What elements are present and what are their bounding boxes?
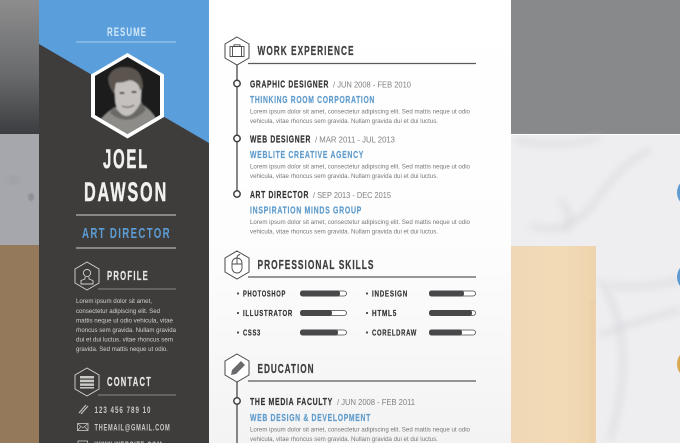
job: web designer: WEBLITE CREATIVE AGENCY: [250, 150, 364, 161]
education entry: vehicula, vitae rhoncus sem gravida. Nullam gravida dui et dui luctus.: [250, 436, 438, 443]
contact: email: THEMAIL@GMAIL.COM: [94, 422, 170, 434]
contact: phone: [79, 405, 152, 416]
profile text: dui et dui luctus. vitae rhoncus sem: [76, 336, 173, 344]
skill: html5: [366, 308, 476, 318]
job: graphic designer: vehicula, vitae rhoncus sem gravida. Nullam gravida dui et dui luctus.: [250, 118, 438, 125]
skill: photoshop: PHOTOSHOP: [243, 288, 286, 298]
job title: ART DIRECTOR: [82, 226, 171, 242]
heading: education: [225, 354, 476, 382]
profile heading with icon: [75, 262, 176, 290]
job: web designer: [250, 134, 470, 180]
contact heading with icon: [75, 368, 176, 396]
circles at right edge: [677, 178, 680, 379]
job: web designer: / MAR 2011 - JUL 2013: [315, 136, 396, 144]
background: wood board: [0, 245, 596, 443]
heading: work experience: WORK EXPERIENCE: [258, 44, 354, 58]
contact: phone: 123 456 789 10: [94, 405, 152, 416]
contact heading with icon: CONTACT: [107, 375, 152, 389]
skill: html5: HTML5: [372, 308, 397, 318]
profile text: [76, 298, 176, 353]
job: art director: / SEP 2013 - DEC 2015: [313, 191, 391, 200]
contact: website: [78, 440, 162, 443]
portrait hexagon: [91, 53, 164, 138]
blue header shape: [39, 0, 209, 143]
heading: work experience: [225, 37, 476, 65]
job: web designer: Lorem ipsum dolor sit amet, consectetur adipiscing elit. Sed mattis neque ut odio: [250, 164, 470, 170]
skills list: [237, 288, 476, 338]
profile text: gravida. Sed mattis neque ut odio.: [76, 346, 168, 353]
job: web designer: WEB DESIGNER: [250, 134, 311, 146]
education entry: THE MEDIA FACULTY: [250, 397, 333, 408]
heading: education: EDUCATION: [258, 362, 314, 376]
education entry: [250, 397, 470, 443]
main paper panel: [209, 0, 511, 443]
background: top grey wall: [0, 0, 680, 134]
sidebar panel: [39, 0, 209, 443]
job: art director: [250, 190, 470, 236]
icon: pencil: [231, 361, 245, 375]
skill: css3: CSS3: [243, 328, 261, 338]
skill: photoshop: [237, 288, 346, 298]
icon: briefcase: [230, 45, 244, 56]
heading: professional skills: PROFESSIONAL SKILLS: [258, 258, 374, 272]
education entry: Lorem ipsum dolor sit amet, consectetur adipiscing elit. Sed mattis neque ut odio: [250, 426, 470, 434]
skill: css3: [237, 328, 346, 338]
name: JOEL: [103, 144, 149, 174]
profile text: rhoncus sem gravida. Nullam gravida: [76, 327, 176, 334]
job: web designer: vehicula, vitae rhoncus sem gravida. Nullam gravida dui et dui luctus.: [250, 173, 438, 180]
job: art director: INSPIRATION MINDS GROUP: [250, 206, 362, 216]
skill: illustrator: [237, 308, 346, 318]
timeline: work experience: [234, 65, 240, 197]
skill: coreldraw: [366, 328, 476, 338]
job: graphic designer: THINKING ROOM CORPORATION: [250, 95, 375, 106]
job: graphic designer: GRAPHIC DESIGNER: [250, 80, 329, 90]
job: graphic designer: / JUN 2008 - FEB 2010: [333, 80, 412, 90]
job: art director: Lorem ipsum dolor sit amet, consectetur adipiscing elit. Sed mattis neque ut odio: [250, 219, 470, 226]
contact: email: [78, 422, 170, 434]
job: art director: vehicula, vitae rhoncus sem gravida. Nullam gravida dui et dui luctus.: [250, 228, 438, 236]
icon: mouse: [232, 254, 242, 273]
profile text: consectetur adipiscing elit. Sed: [76, 308, 160, 315]
job: art director: ART DIRECTOR: [250, 190, 309, 201]
timeline: education: [234, 382, 240, 443]
education entry: / JUN 2008 - FEB 2011: [337, 398, 416, 407]
skill: indesign: INDESIGN: [372, 288, 408, 298]
profile text: mattis neque ut odio vehicula, vitae: [76, 318, 173, 324]
background: marble surface: [0, 134, 680, 443]
education entry: WEB DESIGN & DEVELOPMENT: [250, 413, 371, 424]
profile text: Lorem ipsum dolor sit amet,: [76, 298, 152, 305]
heading: professional skills: [225, 251, 476, 279]
sidebar panel: DAWSON: [84, 177, 168, 207]
job: graphic designer: [250, 80, 470, 125]
skill: coreldraw: CORELDRAW: [372, 328, 417, 338]
job: graphic designer: Lorem ipsum dolor sit amet, consectetur adipiscing elit. Sed mattis neque ut odio: [250, 108, 470, 116]
profile heading with icon: PROFILE: [107, 269, 149, 283]
resume label: RESUME: [107, 25, 147, 39]
skill: indesign: [366, 288, 476, 298]
skill: illustrator: ILLUSTRATOR: [243, 308, 293, 318]
